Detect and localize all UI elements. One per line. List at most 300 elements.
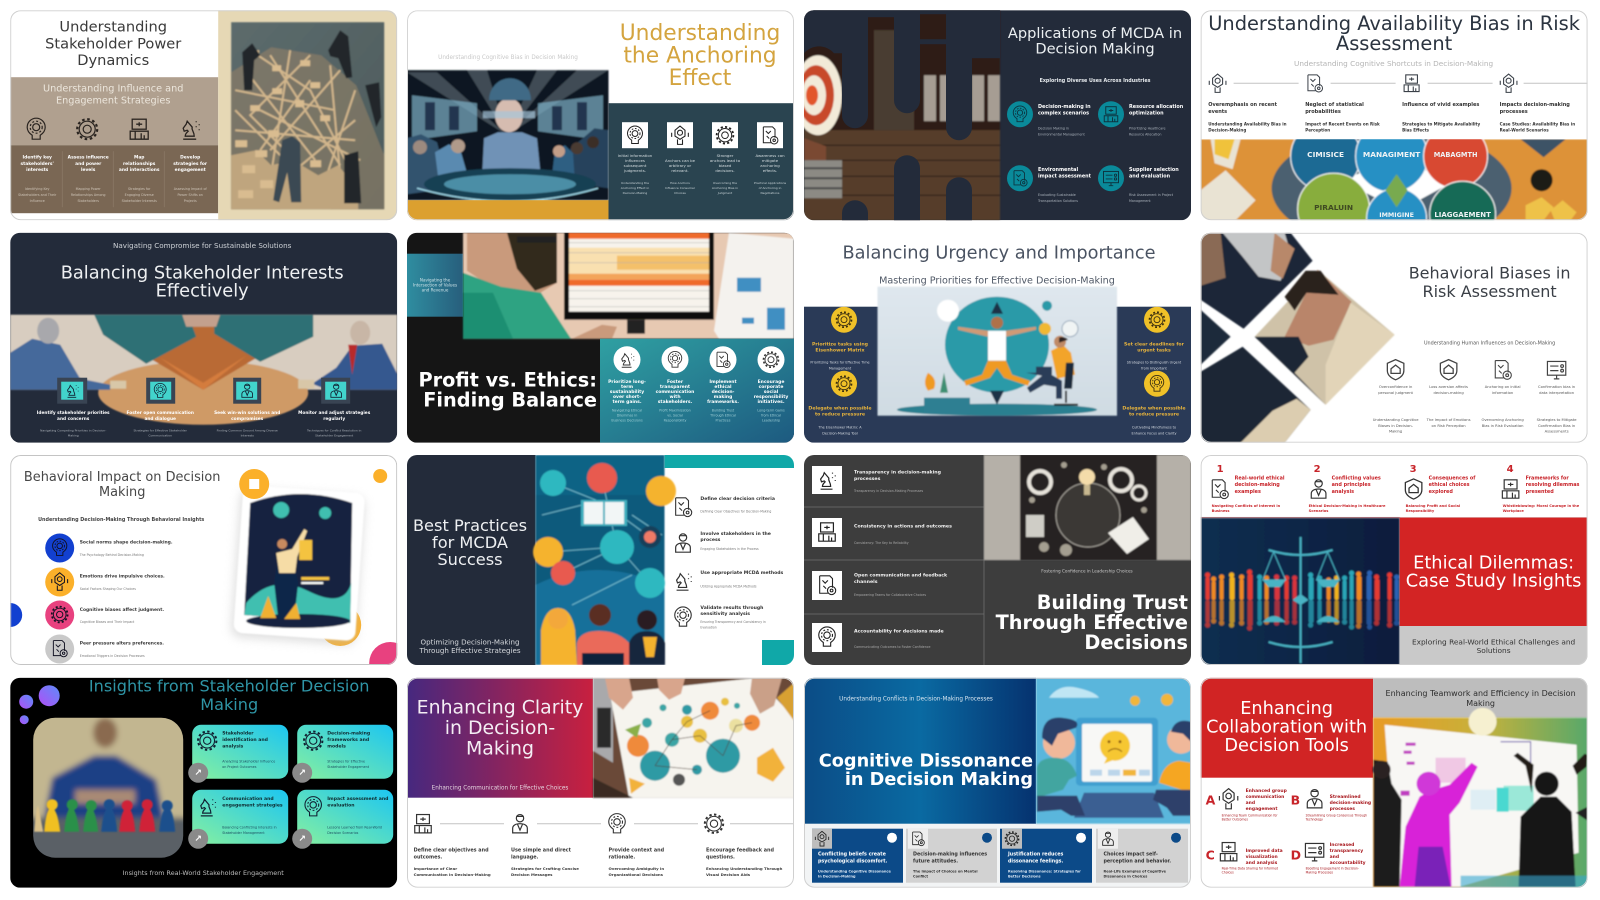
action panel: Through Ethical (709, 414, 736, 418)
bias points: Anchoring Bias in (712, 186, 738, 190)
panel: Behavioral Biases in Risk Assessment (1201, 233, 1588, 443)
title: Decision Making (1035, 41, 1155, 58)
action panel: stakeholders. (658, 399, 693, 405)
action panel: Prioritize long- (608, 379, 646, 385)
practice list: sensitivity analysis (700, 611, 750, 617)
bias points: decisions. (715, 168, 735, 173)
bias points: Negotiations (760, 191, 780, 195)
title: Insights from Stakeholder Decision (89, 677, 369, 696)
dissonance cards: The Impact of Choices on Mental (913, 870, 978, 874)
priority tips (808, 307, 1186, 435)
title block: Enhancing (1240, 699, 1333, 719)
priority tips: to reduce pressure (1129, 412, 1179, 418)
commitment rows: Consistency: The Key to Reliability (854, 541, 909, 545)
photo: management diagram on desk: LIAGGAEMENT (1434, 211, 1491, 219)
photo: blurred man with game pawns (25, 708, 195, 868)
subtitle block (1400, 626, 1588, 665)
action panel: from Ethical (761, 414, 781, 418)
commitment rows: channels (854, 579, 878, 585)
title: Building Trust (1037, 591, 1188, 614)
bias points: influences (625, 158, 645, 163)
insight cards: Decision-making (327, 731, 370, 737)
commitment rows: Accountability for decisions made (854, 628, 944, 634)
bias points: Practical Applications (754, 181, 786, 185)
photo: people in X-shaped mosaic (1201, 233, 1395, 443)
bias points (608, 103, 794, 220)
panel: Understanding Availability Bias in Risk Assessment (1200, 10, 1588, 220)
tool items (1206, 788, 1371, 875)
action items: and concerns (57, 416, 90, 422)
insight cards: Impact assessment and (327, 796, 388, 802)
tool items: Enhancing Team Communication for (1222, 814, 1278, 818)
strategy columns: Stakeholders and Their (18, 193, 57, 197)
priority tips: The Eisenhower Matrix: A (817, 426, 862, 430)
action panel: Business Decisions (611, 419, 643, 423)
action items: regularly (323, 416, 345, 422)
insight cards: evaluation (327, 803, 355, 809)
subtitle block: Enhancing Teamwork and Efficiency in Decision (1386, 689, 1576, 698)
tool items: and (1246, 800, 1255, 806)
subtitle band (10, 77, 218, 145)
priority tips: to reduce pressure (815, 412, 865, 418)
photo: analyst with spreadsheet (463, 233, 794, 339)
clarity items: Strategies for Crafting Concise (511, 866, 579, 871)
clarity items: Enhancing Understanding Through (706, 866, 783, 871)
panel: Enhancing Clarity in Decision-Making (407, 678, 794, 888)
tool items: and analysis (1246, 860, 1278, 866)
application items: Environmental (1038, 167, 1078, 173)
insight cards (188, 725, 393, 849)
title block: Case Study Insights (1406, 570, 1581, 592)
insight cards: models (327, 743, 346, 749)
timeline icons (1209, 74, 1589, 92)
panel: Best Practices for MCDA Success (407, 455, 794, 665)
insight cards: on Project Outcomes (222, 765, 257, 769)
bias items: Influence of vivid examples (1402, 102, 1479, 108)
bias notes: Understanding Cognitive (1373, 418, 1419, 422)
title block: Cognitive Dissonance (819, 752, 1033, 772)
dissonance cards: Resolving Dissonance: Strategies for (1008, 870, 1081, 874)
strategy columns: and interactions (119, 167, 160, 173)
title: Understanding (59, 19, 167, 36)
strategy columns: Map (134, 155, 144, 161)
dissonance cards: future attitudes. (913, 858, 958, 864)
application items: Decision-making in (1038, 104, 1091, 110)
application items (1007, 101, 1184, 203)
bias items: Bias Effects (1402, 128, 1430, 133)
numbered cases: 3 (1410, 464, 1417, 475)
priority tips: Delegate when possible (1122, 406, 1186, 412)
practice list: Utilizing Appropriate MCDA Methods (700, 584, 757, 588)
numbered cases: Scenarios (1309, 509, 1328, 513)
tool items: processes (1330, 806, 1355, 812)
title block: in Decision Making (845, 770, 1033, 790)
panel: Applications of MCDA in Decision Making (804, 10, 1191, 220)
bias points: Initial information (618, 153, 653, 158)
photo: management diagram on desk: PIRALUIN (1314, 203, 1353, 212)
insight cards: Lessons Learned from Real-World (327, 826, 382, 830)
tool items: communication (1246, 794, 1284, 800)
title: Applications of MCDA in (1008, 25, 1182, 42)
behaviour list: Cognitive Biases and Their Impact (80, 620, 135, 624)
action panel: vs. Social (667, 414, 683, 418)
tool items: Increased (1330, 842, 1354, 848)
action panel: sustainability (610, 389, 644, 395)
action panel: responsibility (754, 394, 788, 400)
bias items: processes (1500, 109, 1528, 115)
bias points: Choices (674, 191, 686, 195)
tool items: C (1206, 848, 1215, 863)
numbered cases: decision-making (1235, 482, 1280, 488)
strategy columns: Stakeholders (77, 199, 99, 203)
numbered cases: presented (1526, 489, 1554, 495)
clarity items: questions. (706, 854, 735, 860)
title block (1201, 678, 1373, 778)
dissonance cards: Decision-making influences (913, 852, 987, 858)
illustration: two people with tablet (1036, 678, 1195, 824)
bias notes: on Risk Perception (1432, 424, 1466, 428)
title: Behavioral Impact on Decision (24, 470, 220, 485)
illustration: balanced person and desk worker (878, 287, 1117, 416)
strategy columns: Identify key (22, 155, 52, 161)
bias points: Understanding the (621, 181, 649, 185)
bias points: Anchors can be (665, 158, 696, 163)
tool items: and (1330, 854, 1339, 860)
action panel: term (621, 384, 633, 390)
bias items: Strategies to Mitigate Availability (1402, 122, 1480, 127)
dissonance cards: Understanding Cognitive Dissonance (818, 870, 891, 874)
bias notes: The Impact of Emotions (1426, 418, 1471, 422)
subtitle: Understanding Human Influences on Decision-Making (1424, 341, 1555, 347)
practice list (675, 496, 784, 630)
bias points: Awareness can (755, 153, 785, 158)
bias icons (1387, 360, 1566, 380)
action panel: Navigating Ethical (612, 409, 642, 413)
bias notes: information (1492, 391, 1514, 395)
tool items: Real-Time Data Sharing for Informed (1222, 867, 1278, 871)
clarity items: Use simple and direct (511, 848, 572, 854)
application items: optimization (1129, 111, 1164, 117)
insight cards: ↗ (298, 769, 306, 779)
action panel: Leadership (762, 419, 780, 423)
subtitle block (1373, 678, 1588, 718)
title block (407, 678, 593, 798)
application items: Environmental Management (1038, 133, 1085, 137)
bias notes: Anchoring on initial (1485, 385, 1520, 389)
tool items: visualization (1246, 854, 1278, 860)
bias notes: Loss aversion affects (1429, 385, 1468, 389)
strategy columns: Engaging Diverse (125, 193, 154, 197)
priority tips: Decision-Making Tool (822, 431, 858, 435)
insight cards: analysis (222, 743, 244, 749)
strategy columns: engagement (175, 167, 206, 173)
strategy columns: Assessing Impact of (174, 187, 207, 191)
priority tips: Delegate when possible (808, 406, 872, 412)
dissonance cards: dissonance feelings. (1008, 858, 1064, 864)
action items (37, 410, 370, 421)
priority tips: from Important (1141, 366, 1168, 370)
decorative shapes and tablet illustration (0, 469, 411, 684)
numbered cases: 4 (1507, 464, 1514, 475)
title: Effectively (156, 281, 249, 302)
subtitle: Navigating Compromise for Sustainable Solutions (113, 241, 292, 250)
illustration: scales of justice with people (1201, 518, 1400, 665)
panel: Profit vs. Ethics: Finding Balance (407, 233, 794, 443)
dissonance cards: Dissonance in Choices (1104, 874, 1147, 878)
action items: compromises (231, 416, 264, 422)
tool items: Better Outcomes (1222, 818, 1248, 822)
action panel: decision- (712, 389, 735, 395)
commitment rows: Transparency in Decision-Making Processes (853, 489, 923, 493)
title: Decisions (1084, 631, 1188, 654)
commitment rows: Consistency in actions and outcomes (854, 524, 952, 530)
action panel: Long-term Gains (757, 409, 785, 413)
action items: Seek win-win solutions and (214, 410, 280, 416)
photo: flat lay with bulb and targets (984, 455, 1191, 560)
numbered cases: Consequences of (1429, 476, 1476, 482)
strategy columns: stakeholders' (21, 161, 54, 167)
tool items: Making Processes (1306, 871, 1333, 875)
practice list: Ensuring Transparency and Consistency in (700, 620, 766, 624)
title: Balancing Stakeholder Interests (61, 263, 344, 284)
tool items: Streamlined (1330, 794, 1361, 800)
subtitle block: Making (1466, 699, 1495, 708)
commitment rows: processes (854, 476, 881, 482)
dissonance cards: Justification reduces (1007, 852, 1064, 858)
action panel: with (669, 394, 681, 400)
practice list: Use appropriate MCDA methods (700, 570, 784, 576)
bias items: Real-World Scenarios (1500, 128, 1549, 133)
application items: Evaluating Sustainable (1038, 193, 1076, 197)
strategy columns: relationships (123, 161, 156, 167)
panel: Cognitive Dissonance in Decision Making (804, 678, 1195, 888)
tool items: decision-making (1330, 800, 1371, 806)
tool items: Enhanced group (1246, 788, 1288, 794)
bias points: arbitrary or (669, 163, 691, 168)
tool items: Boosting Engagement in Decision- (1306, 867, 1359, 871)
clarity items: Organizational Decisions (608, 872, 664, 877)
priority tips: Cultivating Mindfulness to (1132, 426, 1176, 430)
icon tiles (57, 378, 350, 404)
bias points: Overcoming the (713, 181, 737, 185)
behaviour list: Emotional Triggers in Decision Processes (80, 654, 145, 658)
photo: management diagram on desk: MABAGMTH (1434, 151, 1477, 159)
insight cards: Analyzing Stakeholder Influence (222, 760, 275, 764)
panel: Building Trust Through Effective Decisions (804, 455, 1191, 665)
panel: Understanding Stakeholder Power Dynamics (10, 10, 397, 220)
supporting notes: Stakeholder Engagement (315, 434, 354, 438)
supporting notes: Techniques for Conflict Resolution in (306, 429, 361, 433)
application items: Prioritizing Healthcare (1129, 127, 1166, 131)
subtitle: Through Effective Strategies (418, 646, 521, 655)
tool items: Improved data (1246, 848, 1283, 854)
application items: Resource Allocation (1129, 133, 1161, 137)
tool items: Technology (1305, 818, 1323, 822)
photo: hands over colourful mind map (593, 678, 794, 798)
strategy columns: Identifying Key (25, 187, 50, 191)
practice list: Evaluation (700, 626, 717, 630)
subtitle: Understanding Cognitive Bias in Decision Making (438, 55, 578, 61)
dissonance cards: Real-Life Examples of Cognitive (1104, 870, 1167, 874)
priority tips: Set clear deadlines for (1124, 342, 1185, 348)
supporting notes: Making (68, 434, 79, 438)
photo: negotiating figures (10, 315, 397, 425)
supporting notes: Strategies for Effective Stakeholder (134, 429, 188, 433)
strategy columns: levels (81, 167, 96, 173)
title: Through Effective (996, 611, 1188, 634)
action panel: term gains. (612, 399, 642, 405)
priority tips: Eisenhower Matrix (815, 348, 865, 354)
numbered cases: Business (1212, 509, 1230, 513)
bias items: events (1208, 109, 1227, 115)
action panel: making (714, 394, 732, 400)
supporting notes (40, 430, 362, 437)
behaviour list: The Psychology Behind Decision-Making (79, 553, 144, 557)
action panel: Implement (709, 379, 737, 385)
insight cards: engagement strategies (222, 803, 283, 809)
numbered cases: Workplace (1503, 509, 1524, 513)
supporting notes: Communication (148, 434, 172, 438)
bias points: How Anchors (670, 181, 690, 185)
behaviour list: Social norms shape decision-making. (80, 540, 173, 546)
action panel: transparent (660, 384, 691, 390)
action panel: Encourage (758, 379, 784, 385)
bias points: of Anchoring in (759, 186, 781, 190)
numbered cases: Real-world ethical (1235, 476, 1285, 482)
tool items: A (1206, 793, 1216, 808)
action panel: corporate (759, 384, 783, 390)
clarity items (414, 848, 783, 877)
insight cards: Stakeholder Management (222, 831, 265, 835)
title: Dynamics (77, 52, 149, 69)
priority tips: urgent tasks (1137, 348, 1171, 354)
tool items: D (1291, 848, 1301, 863)
action panel: frameworks. (707, 399, 739, 405)
application items: and evaluation (1129, 174, 1171, 180)
numbered cases: Navigating Conflicts of Interest in (1212, 504, 1281, 508)
action panel (600, 339, 794, 443)
insight cards: Decision Scenarios (327, 831, 359, 835)
dissonance cards (812, 829, 1188, 883)
tool items: engagement (1246, 806, 1278, 812)
practice list: process (700, 537, 721, 543)
practice list: Involve stakeholders in the (700, 531, 771, 537)
panel: Balancing Stakeholder Interests Effectively (10, 233, 397, 443)
bias points: mitigate (762, 158, 779, 163)
insight cards: frameworks and (327, 737, 369, 743)
tool items: B (1291, 793, 1300, 808)
strategy columns: Mapping Power (76, 187, 101, 191)
priority tips: Enhance Focus and Clarity (1132, 431, 1176, 435)
strategy columns: Projects (184, 199, 197, 203)
application items: impact assessment (1038, 174, 1092, 180)
clarity items: Importance of Clear (414, 866, 457, 871)
application items: Resource allocation (1129, 104, 1184, 110)
subtitle band: Engagement Strategies (56, 96, 170, 107)
caption: Insights from Real-World Stakeholder Engagement (123, 869, 284, 877)
dissonance cards: Choices impact self- (1104, 852, 1158, 858)
clarity items: Overcoming Ambiguity in (608, 866, 664, 871)
tool items: Streamlining Group Consensus Through (1306, 814, 1367, 818)
subtitle: Understanding Decision-Making Through Behavioral Insights (38, 517, 204, 523)
bias items (1208, 102, 1575, 133)
bias items: Impacts decision-making (1500, 102, 1570, 108)
subtitle: Optimizing Decision-Making (421, 638, 519, 646)
panel: Ethical Dilemmas: Case Study Insights (1201, 455, 1588, 665)
insight cards: ↗ (298, 835, 306, 845)
timeline icons (415, 814, 794, 833)
bias notes: decision-making (1433, 391, 1464, 395)
title block: Decision Tools (1224, 736, 1349, 756)
behaviour list: Emotions drive impulsive choices. (80, 574, 165, 580)
numbered cases: Ethical Decision-Making in Healthcare (1309, 504, 1386, 508)
side note: and Revenue (422, 288, 449, 293)
panel: Balancing Urgency and Importance (804, 233, 1191, 443)
strategy columns: strategies for (173, 161, 208, 167)
title: Best Practices (413, 516, 527, 535)
commitment rows: Transparency in decision-making (854, 470, 941, 476)
application items: complex scenarios (1038, 111, 1089, 117)
action items: Monitor and adjust strategies (298, 410, 371, 416)
title: Behavioral Biases in (1409, 264, 1570, 283)
numbered cases: 2 (1314, 464, 1321, 475)
clarity items: Provide context and (608, 848, 665, 854)
clarity items: Define clear objectives and (414, 848, 489, 854)
bias items: probabilities (1305, 109, 1341, 115)
photo: light bulb and target on wood (804, 10, 1001, 220)
numbered cases: 1 (1217, 464, 1224, 475)
insight cards: Balancing Conflicting Interests in (222, 826, 277, 830)
title: Understanding (620, 21, 780, 46)
strategy columns (10, 145, 218, 213)
title: for MCDA (432, 533, 508, 552)
subtitle: Understanding Cognitive Shortcuts in Decision-Making (1294, 59, 1493, 68)
title: Profit vs. Ethics: (418, 369, 597, 392)
strategy columns: interests (26, 167, 49, 173)
bias points: biased (719, 163, 732, 168)
title block: Making (466, 738, 534, 760)
title: Success (437, 550, 503, 569)
title block: Enhancing Communication for Effective Choices (432, 786, 568, 792)
numbered cases: Balancing Profit and Social (1406, 504, 1460, 508)
supporting notes: Finding Common Ground Among Diverse (217, 429, 278, 433)
panel: Enhancing Collaboration with Decision Tools (1201, 678, 1588, 888)
action panel: over short- (613, 394, 641, 400)
supporting notes: Navigating Competing Priorities in Decision- (40, 429, 106, 433)
bias notes: Strategies to Mitigate (1537, 418, 1577, 422)
action panel: social (764, 389, 779, 395)
photo: woman at futuristic table (407, 70, 608, 201)
panel: Behavioral Impact on Decision Making (0, 455, 411, 684)
subtitle: Fostering Confidence in Leadership Choices (1041, 568, 1133, 574)
panel: Insights from Stakeholder Decision Making (10, 677, 397, 888)
bias notes: Assessments (1545, 430, 1569, 434)
bias points: Stronger (717, 153, 734, 158)
title: Risk Assessment (1422, 282, 1557, 301)
behaviour list (45, 534, 173, 664)
insight cards: Strategies for Effective (327, 760, 365, 764)
practice list: Defining Clear Objectives for Decision-Making (700, 510, 771, 514)
numbered cases: Whistleblowing: Moral Courage in the (1503, 504, 1580, 508)
clarity items: Decision Messages (511, 872, 553, 877)
bias items: Impact of Recent Events on Risk (1305, 122, 1380, 127)
subtitle: Mastering Priorities for Effective Decision-Making (879, 276, 1115, 287)
strategy columns: Stakeholder Interests (122, 199, 157, 203)
action items: and dialogue (144, 416, 176, 422)
bias points: anchors lead to (710, 158, 741, 163)
action items: Foster open communication (127, 410, 194, 416)
insight cards: Stakeholder (222, 731, 254, 737)
